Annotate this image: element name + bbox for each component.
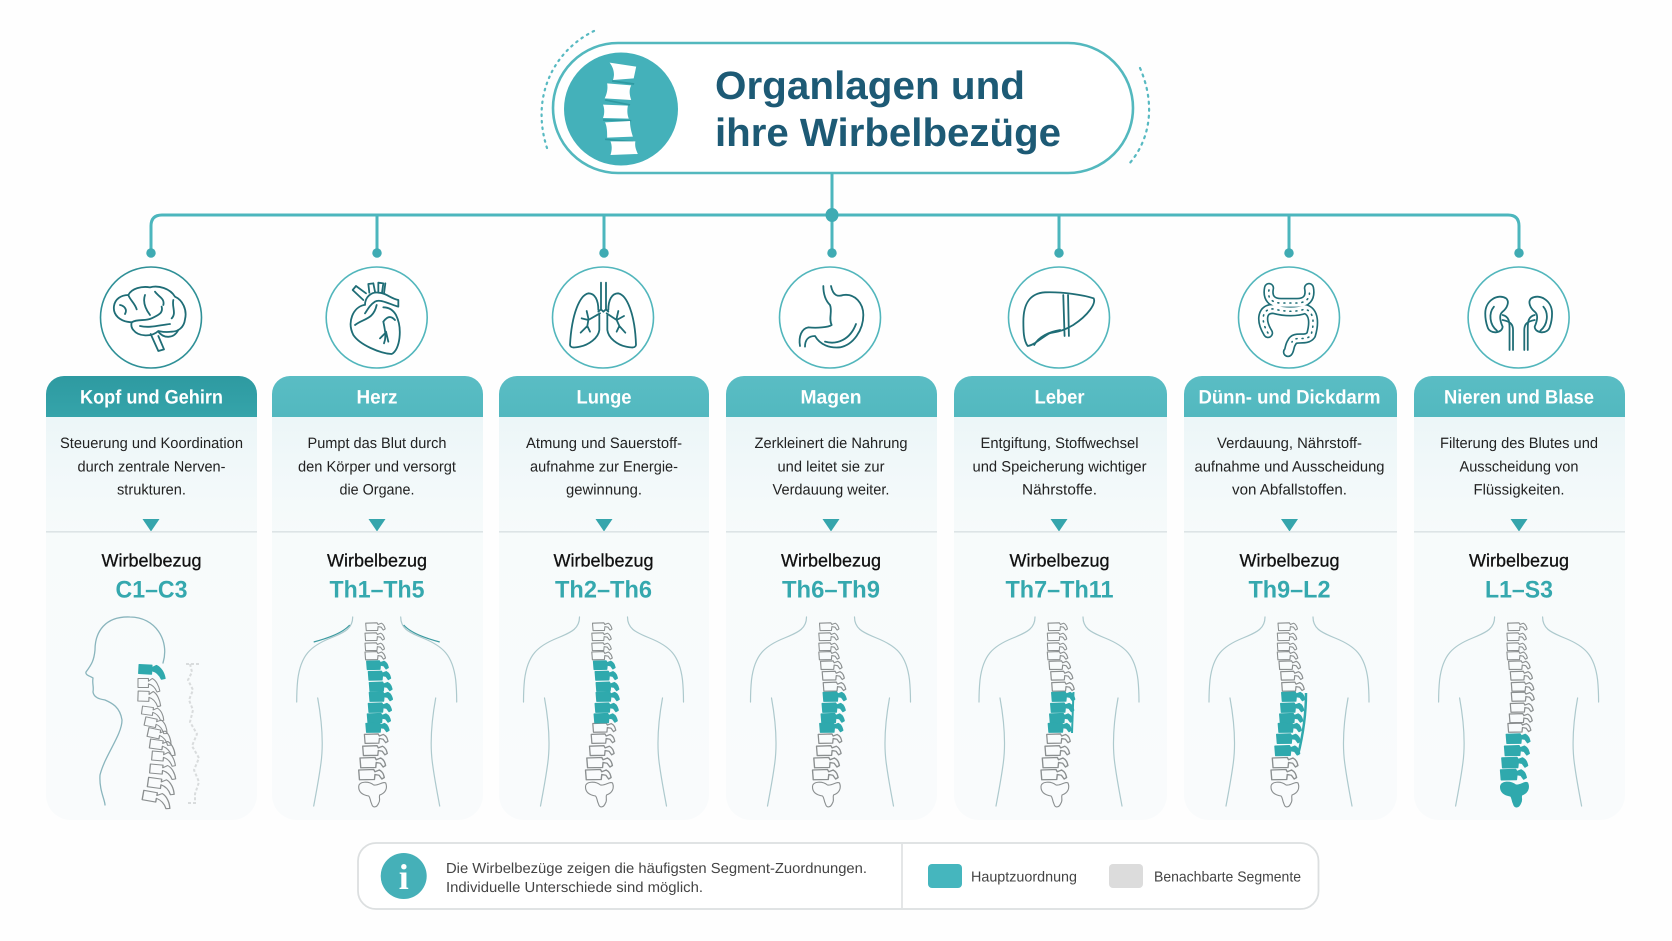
description bbox=[526, 435, 682, 498]
description: Ausscheidung von bbox=[1460, 458, 1578, 475]
icon: info: i bbox=[399, 857, 409, 897]
figure: torso with spine Th6–Th9 bbox=[750, 617, 910, 807]
decorative dotted arc left bbox=[542, 31, 594, 148]
range L1–S3: L1–S3 bbox=[1485, 576, 1553, 603]
description: Flüssigkeiten. bbox=[1474, 482, 1564, 498]
figure: torso with spine Th9–L2 bbox=[1209, 617, 1369, 807]
column: Magen bbox=[726, 267, 937, 820]
title text: ihre Wirbelbezüge bbox=[715, 111, 1061, 155]
description: Atmung und Sauerstoff- bbox=[526, 435, 682, 452]
description: aufnahme zur Energie- bbox=[530, 458, 678, 475]
arrow bbox=[822, 519, 840, 532]
header bbox=[954, 376, 1167, 417]
label Wirbelbezug: Wirbelbezug bbox=[102, 551, 202, 571]
title pill bbox=[553, 43, 1133, 173]
header bbox=[1184, 376, 1397, 417]
figure: head profile with cervical spine bbox=[86, 617, 200, 809]
description: Pumpt das Blut durch bbox=[308, 435, 446, 452]
arrow bbox=[1050, 519, 1068, 532]
figure: torso with spine Th2–Th6 bbox=[524, 617, 684, 807]
header bbox=[272, 376, 483, 417]
description: Steuerung und Koordination bbox=[60, 435, 243, 452]
icon: brain bbox=[100, 267, 202, 368]
connector tree bbox=[146, 173, 1524, 258]
label Wirbelbezug: Wirbelbezug bbox=[327, 551, 427, 571]
description bbox=[60, 435, 243, 498]
column: Herz bbox=[272, 267, 483, 820]
label Wirbelbezug: Wirbelbezug bbox=[1240, 551, 1340, 571]
range Th9–L2: Th9–L2 bbox=[1248, 576, 1330, 603]
description: die Organe. bbox=[340, 482, 414, 498]
card background bbox=[1414, 417, 1625, 820]
label Wirbelbezug: Wirbelbezug bbox=[781, 551, 881, 571]
card background bbox=[499, 417, 709, 820]
legend box bbox=[358, 843, 1318, 909]
header bbox=[499, 376, 709, 417]
card background bbox=[1184, 417, 1397, 820]
note text: Die Wirbelbezüge zeigen die häufigsten Segment-Zuordnungen. bbox=[446, 861, 867, 877]
figure: torso with spine L1–S3 bbox=[1439, 617, 1599, 807]
decorative dotted arc right bbox=[1129, 68, 1149, 164]
range Th7–Th11: Th7–Th11 bbox=[1006, 576, 1114, 603]
description bbox=[298, 435, 457, 498]
description: Verdauung weiter. bbox=[772, 482, 890, 498]
header: Nieren und Blase bbox=[1444, 386, 1594, 408]
note text: Individuelle Unterschiede sind möglich. bbox=[446, 880, 703, 896]
arrow bbox=[142, 519, 160, 532]
header: Lunge bbox=[576, 386, 632, 408]
card background bbox=[272, 417, 483, 820]
description: Filterung des Blutes und bbox=[1440, 435, 1598, 452]
title text bbox=[715, 64, 1061, 155]
description: von Abfallstoffen. bbox=[1232, 482, 1347, 498]
description: Nährstoffe. bbox=[1022, 482, 1097, 498]
label Wirbelbezug: Wirbelbezug bbox=[1469, 551, 1569, 571]
range C1–C3: C1–C3 bbox=[116, 576, 188, 603]
card background bbox=[726, 417, 937, 820]
arrow bbox=[1281, 519, 1298, 532]
header: Magen bbox=[800, 386, 862, 408]
description: und leitet sie zur bbox=[778, 458, 884, 475]
header bbox=[1414, 376, 1625, 417]
header bbox=[46, 376, 257, 417]
title banner bbox=[542, 31, 1149, 173]
column: Nieren und Blase bbox=[1414, 267, 1625, 820]
legend: Benachbarte Segmente: Benachbarte Segmente bbox=[1154, 870, 1301, 886]
icon: heart bbox=[326, 267, 427, 368]
icon: spine in circle bbox=[564, 52, 678, 166]
column: Lunge bbox=[499, 267, 709, 820]
description: Verdauung, Nährstoff- bbox=[1217, 435, 1362, 452]
header: Kopf und Gehirn bbox=[80, 386, 223, 408]
description: und Speicherung wichtiger bbox=[972, 458, 1147, 475]
note text bbox=[446, 861, 867, 896]
header bbox=[726, 376, 937, 417]
header: Herz bbox=[356, 386, 398, 408]
range Th6–Th9: Th6–Th9 bbox=[782, 576, 880, 603]
range Th2–Th6: Th2–Th6 bbox=[555, 576, 652, 603]
description bbox=[754, 435, 908, 498]
legend: Hauptzuordnung: Hauptzuordnung bbox=[971, 870, 1077, 886]
description: aufnahme und Ausscheidung bbox=[1194, 458, 1384, 475]
legend: Hauptzuordnung bbox=[928, 864, 1077, 888]
column: Dünn- und Dickdarm bbox=[1184, 267, 1397, 820]
arrow bbox=[1510, 519, 1528, 532]
description: strukturen. bbox=[117, 482, 186, 498]
description: den Körper und versorgt bbox=[298, 458, 457, 475]
card background bbox=[46, 417, 257, 820]
range Th1–Th5: Th1–Th5 bbox=[330, 576, 424, 603]
column: Kopf und Gehirn bbox=[46, 267, 257, 820]
label Wirbelbezug: Wirbelbezug bbox=[554, 551, 654, 571]
label Wirbelbezug: Wirbelbezug bbox=[1010, 551, 1110, 571]
arrow bbox=[596, 519, 612, 532]
arrow bbox=[368, 519, 386, 532]
icon: liver bbox=[1008, 267, 1110, 368]
icon: stomach bbox=[780, 267, 880, 368]
icon: lungs bbox=[552, 267, 654, 368]
description: gewinnung. bbox=[566, 482, 642, 498]
description: Entgiftung, Stoffwechsel bbox=[980, 435, 1138, 452]
icon: info bbox=[381, 853, 427, 899]
icon: kidneys bbox=[1468, 267, 1569, 368]
description bbox=[1440, 435, 1598, 498]
description: Zerkleinert die Nahrung bbox=[754, 435, 908, 452]
icon: intestines bbox=[1238, 267, 1340, 368]
figure: torso with spine Th7–Th11 bbox=[979, 617, 1139, 807]
description bbox=[972, 435, 1147, 498]
legend: Benachbarte Segmente bbox=[1109, 864, 1301, 888]
header: Leber bbox=[1034, 386, 1085, 408]
title text: Organlagen und bbox=[715, 64, 1025, 108]
figure: torso with spine Th1–Th5 bbox=[297, 617, 457, 807]
card background bbox=[954, 417, 1167, 820]
column: Leber bbox=[954, 267, 1167, 820]
description: durch zentrale Nerven- bbox=[78, 458, 226, 475]
header: Dünn- und Dickdarm bbox=[1198, 386, 1380, 408]
description bbox=[1194, 435, 1384, 498]
